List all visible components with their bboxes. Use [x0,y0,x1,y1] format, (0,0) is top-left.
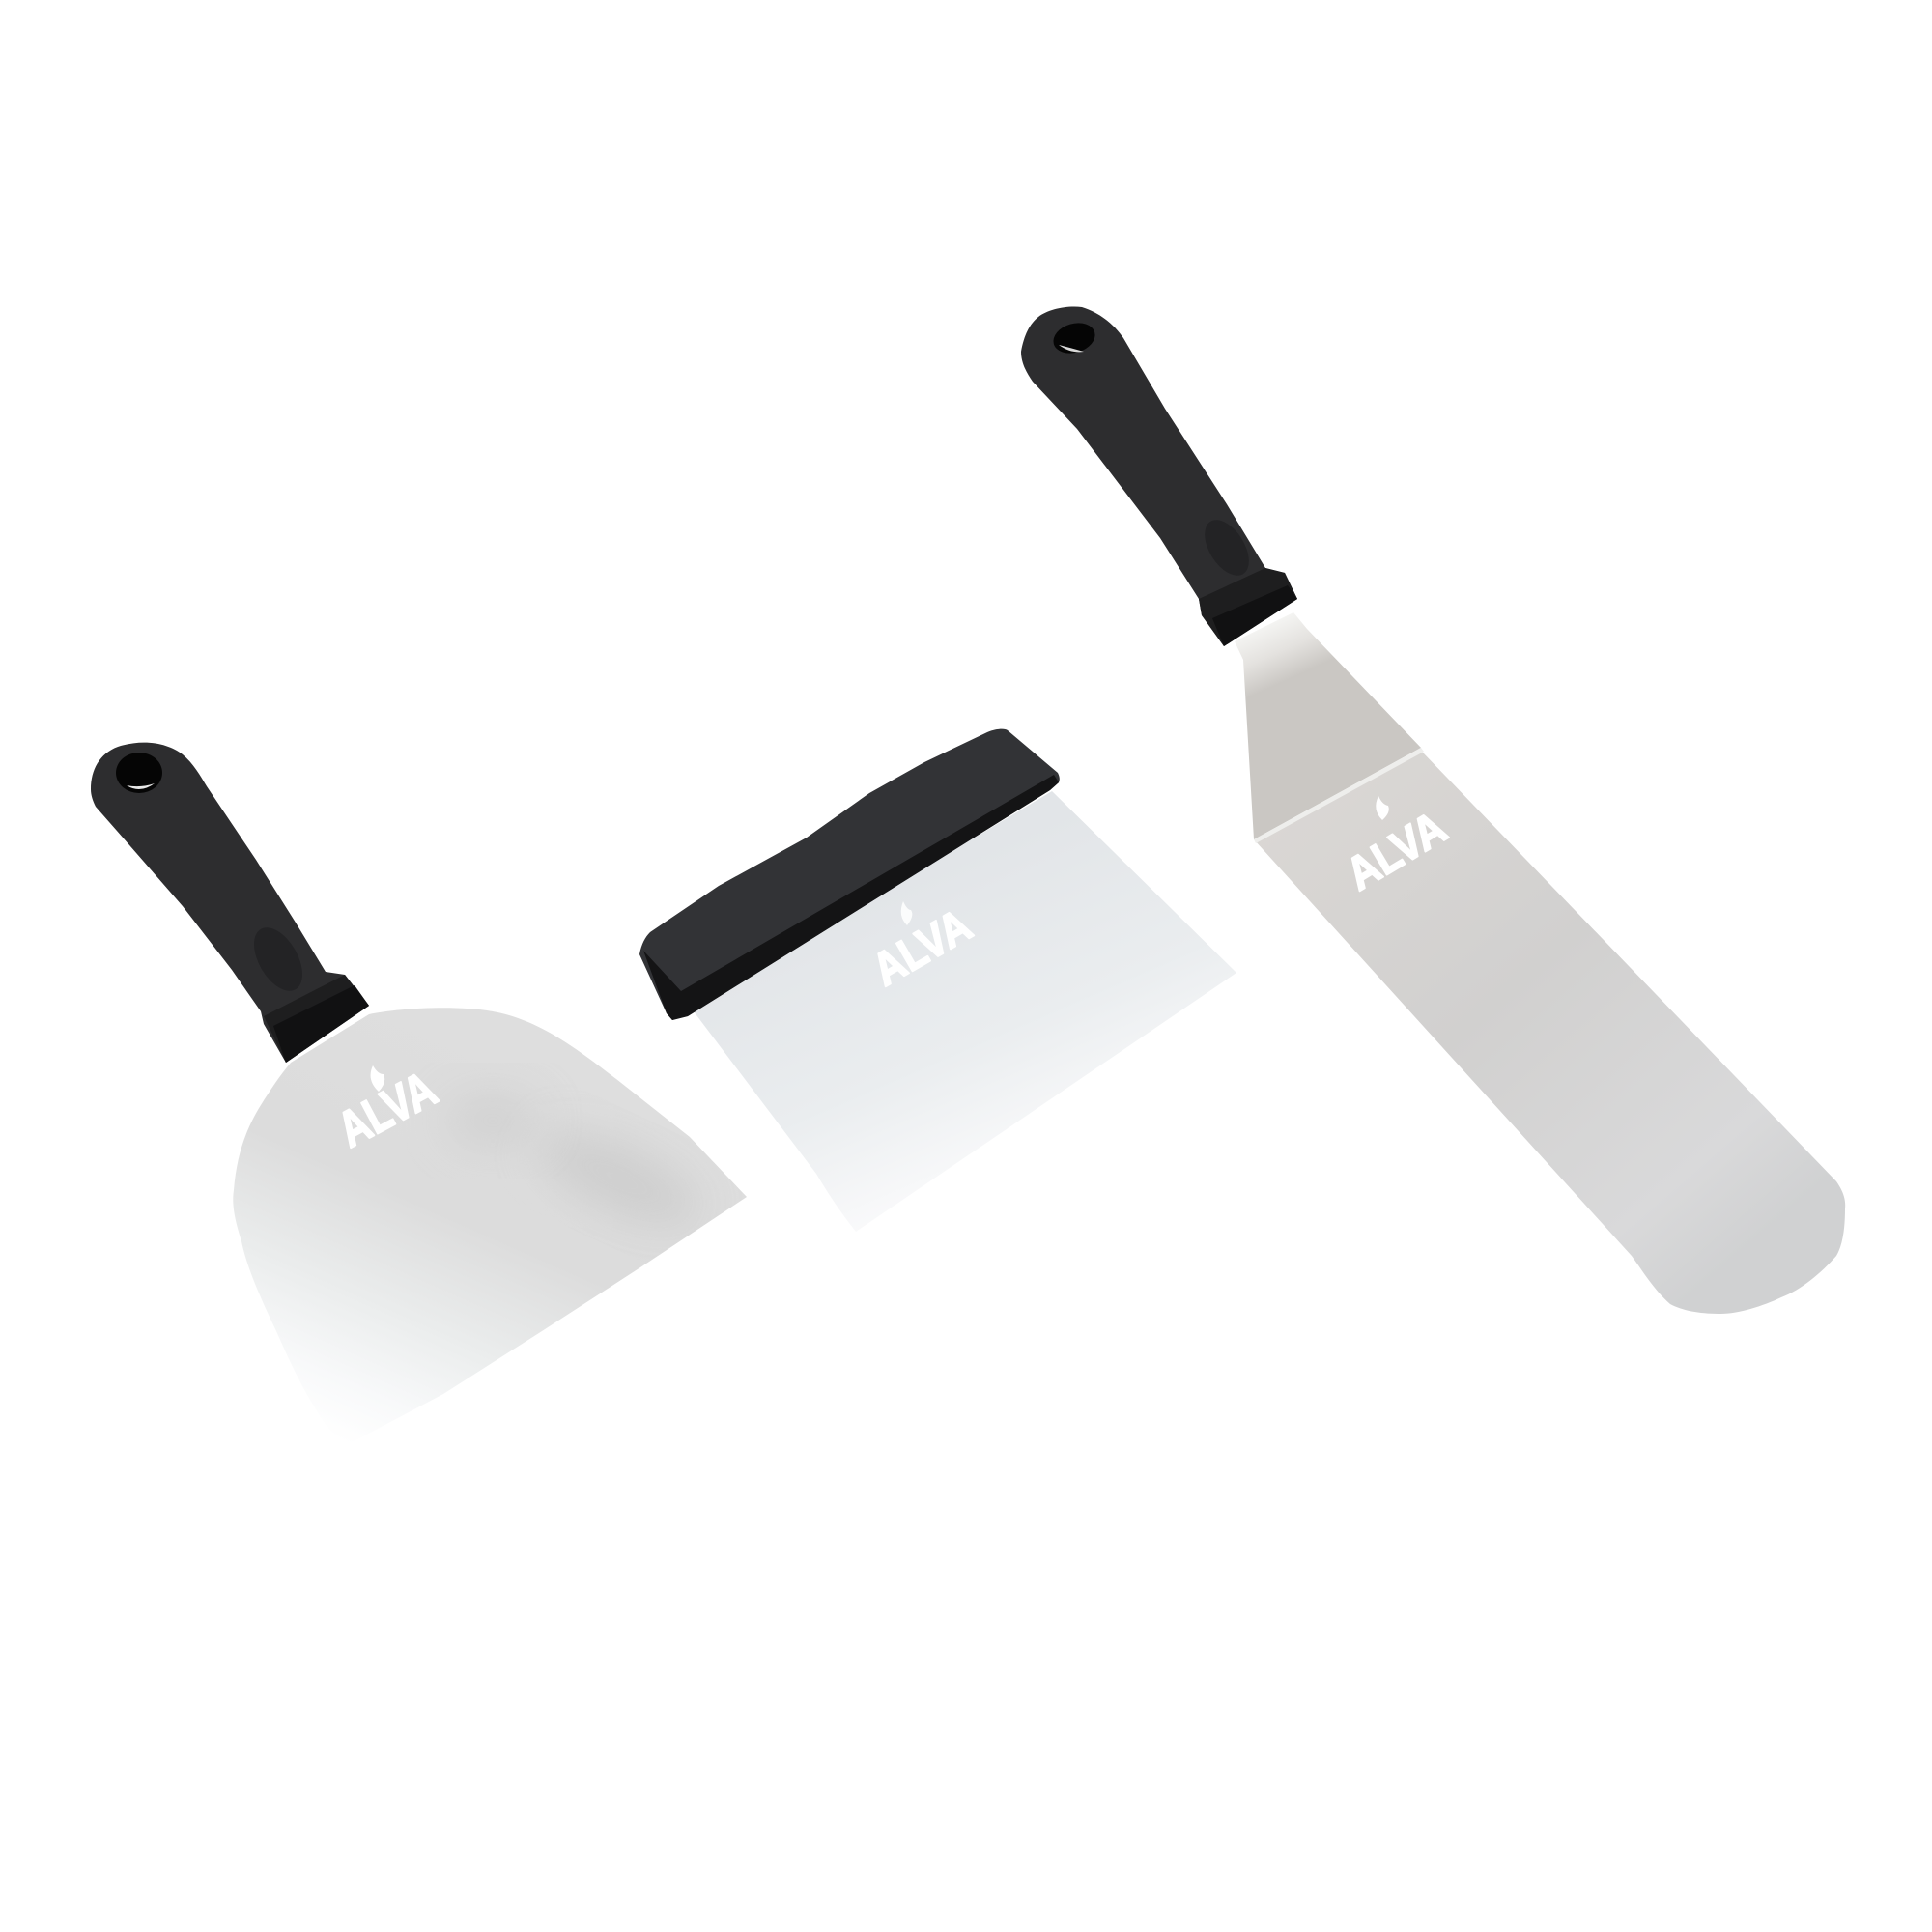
logo: ALVA on dough scraper: ALVA [865,899,980,996]
logo: ALVA on wide spatula: ALVA [329,1061,445,1158]
logo: ALVA on long turner: ALVA [1338,802,1456,900]
tool: wide spatula [91,743,747,1446]
handle: dough scraper [639,729,1060,1020]
blade: long turner [1254,748,1845,1314]
product photo: three ALVA tools [91,307,1845,1406]
handle: long turner [1021,306,1297,646]
blade: dough scraper [691,791,1236,1232]
tool: dough scraper [639,729,1236,1232]
neck: long turner [1235,612,1421,839]
blade: wide spatula [233,1008,747,1446]
tool: long turner spatula [1021,306,1845,1314]
handle: wide spatula [91,743,369,1063]
